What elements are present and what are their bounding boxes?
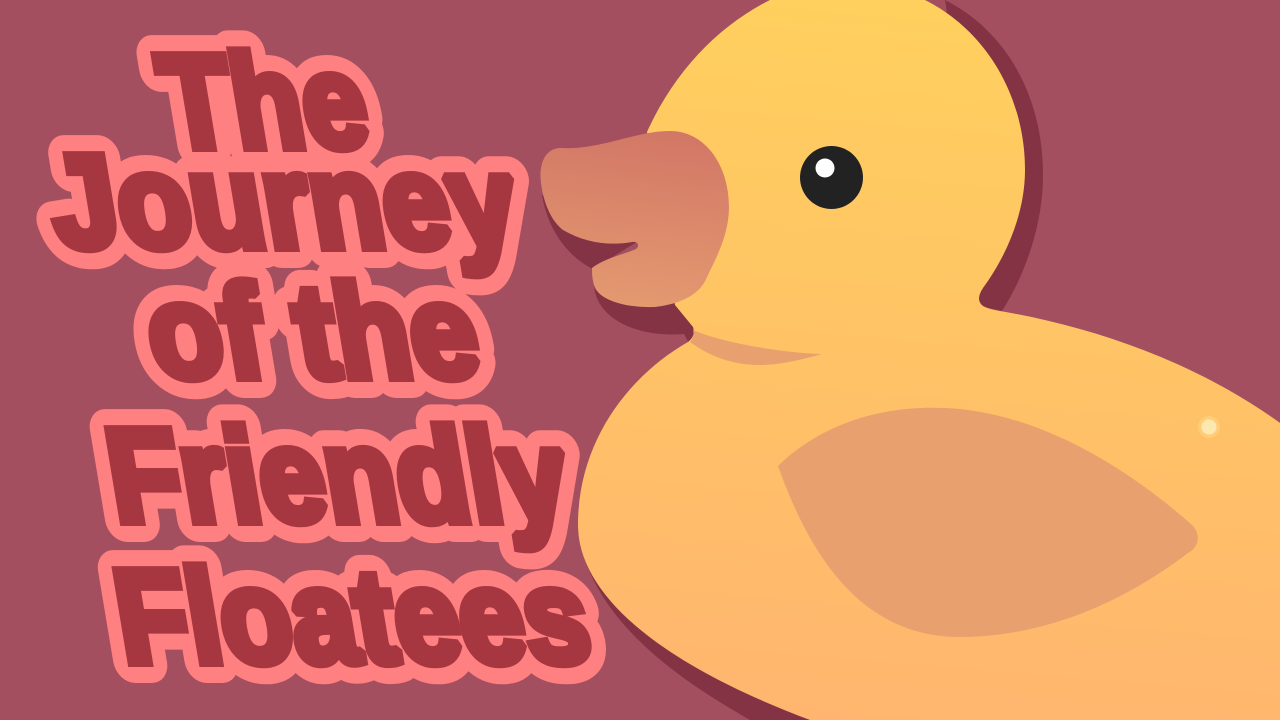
title outline layer: Journey	[38, 129, 527, 276]
title text layer: The	[149, 29, 378, 176]
beak	[540, 131, 729, 307]
body shadow	[578, 500, 900, 720]
lower beak shadow	[594, 285, 700, 345]
neck shading	[690, 330, 822, 365]
title outline layer: The	[149, 29, 378, 176]
title outline layer: Friendly	[96, 403, 578, 550]
title outline layer	[38, 29, 600, 691]
head shadow	[945, 0, 1043, 311]
wing	[778, 408, 1198, 637]
title outline layer: Floatees	[104, 544, 600, 691]
sparkle glow	[1198, 416, 1220, 438]
title text layer: Journey	[38, 129, 527, 276]
title outline layer: of the	[135, 259, 489, 406]
title text layer: of the	[135, 259, 489, 406]
duck illustration	[540, 0, 1280, 720]
upper beak shadow	[542, 195, 640, 269]
title text layer	[38, 29, 600, 691]
eye	[800, 146, 863, 209]
sparkle	[1202, 420, 1216, 434]
title text layer: Floatees	[104, 544, 600, 691]
duck body and head	[578, 0, 1280, 720]
title text layer: Friendly	[96, 403, 578, 550]
title	[38, 29, 600, 691]
eye highlight	[816, 158, 834, 178]
